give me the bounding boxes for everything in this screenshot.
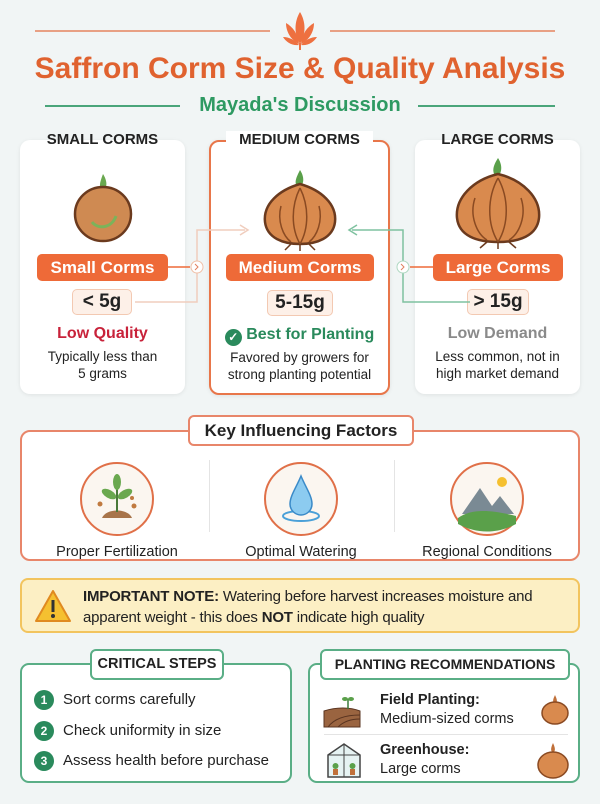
panel: key influencing factors [20, 430, 580, 561]
factor: fertilization [56, 462, 178, 560]
row: field planting: Field Planting: [380, 692, 480, 708]
quality: Low Demand [448, 325, 547, 342]
weight [467, 289, 529, 315]
weight [72, 289, 132, 315]
icon: field [324, 697, 360, 728]
factor: watering [245, 462, 357, 560]
icon: medium onion [264, 170, 336, 251]
description: Less common, not in [435, 349, 560, 364]
callout: important note [20, 578, 580, 633]
panel: large corms [415, 140, 580, 394]
heading: SMALL CORMS [47, 131, 158, 148]
row: greenhouse: Large corms [380, 761, 461, 777]
icon: saffron flower [283, 12, 317, 50]
step 1: 1 [41, 693, 47, 707]
subtitle: Mayada's Discussion [199, 94, 401, 116]
icon: plant [80, 462, 154, 536]
decorative lines [35, 30, 270, 32]
panel: critical steps [20, 663, 292, 783]
icon: water drop [264, 462, 338, 536]
quality: ✓ [228, 330, 238, 344]
description: Favored by growers for [230, 350, 369, 365]
heading: MEDIUM CORMS [239, 131, 360, 148]
quality: Low Quality [57, 325, 148, 342]
heading: Key Influencing Factors [205, 421, 397, 440]
step 1 [34, 690, 196, 710]
row: greenhouse [327, 742, 569, 779]
description [228, 350, 371, 382]
row: field planting [324, 692, 569, 728]
row: field planting: Medium-sized corms [380, 711, 514, 727]
icon: large onion [537, 743, 569, 779]
label pill [37, 254, 168, 281]
icon: large onion [456, 158, 540, 249]
description [48, 349, 157, 381]
factor: regional [422, 462, 552, 560]
icon: warning [35, 590, 71, 622]
heading: CRITICAL STEPS [98, 656, 216, 672]
label pill: Medium Corms [239, 258, 361, 277]
weight [267, 290, 333, 316]
heading [90, 649, 224, 680]
weight: 5-15g [275, 292, 325, 313]
heading: PLANTING RECOMMENDATIONS [335, 656, 555, 672]
weight: > 15g [473, 291, 523, 312]
quality: Best for Planting [246, 326, 374, 343]
description [435, 349, 560, 381]
step 1: Sort corms carefully [63, 691, 196, 708]
panel: planting recommendations [308, 663, 580, 783]
panel: medium corms [209, 140, 390, 395]
arrows: connectors between cards [135, 224, 470, 303]
title: Saffron Corm Size & Quality Analysis [35, 52, 565, 85]
label: Optimal Watering [245, 544, 357, 560]
label pill: Small Corms [51, 258, 154, 277]
heading [320, 649, 570, 680]
step 3: 3 [41, 754, 47, 768]
icon: greenhouse [327, 743, 361, 778]
step 2: 2 [41, 724, 47, 738]
label: Proper Fertilization [56, 544, 178, 560]
label: Regional Conditions [422, 544, 552, 560]
panel: small corms [20, 140, 185, 394]
note text: IMPORTANT NOTE: Watering before harvest increases moisture and apparent weight - this does NOT indicate high quality [83, 588, 532, 626]
row: greenhouse: Greenhouse: [380, 742, 469, 758]
heading: LARGE CORMS [441, 131, 554, 148]
label pill [226, 254, 374, 281]
description: strong planting potential [228, 367, 371, 382]
label pill [433, 254, 563, 281]
heading [188, 415, 414, 446]
icon: small onion [74, 174, 132, 242]
label pill: Large Corms [446, 258, 550, 277]
step 2: Check uniformity in size [63, 722, 221, 739]
description: high market demand [436, 366, 559, 381]
step 3: Assess health before purchase [63, 752, 269, 769]
icon: mountains [450, 462, 524, 536]
description: 5 grams [78, 366, 127, 381]
description: Typically less than [48, 349, 157, 364]
icon: onion [541, 695, 569, 725]
weight: < 5g [83, 291, 121, 312]
